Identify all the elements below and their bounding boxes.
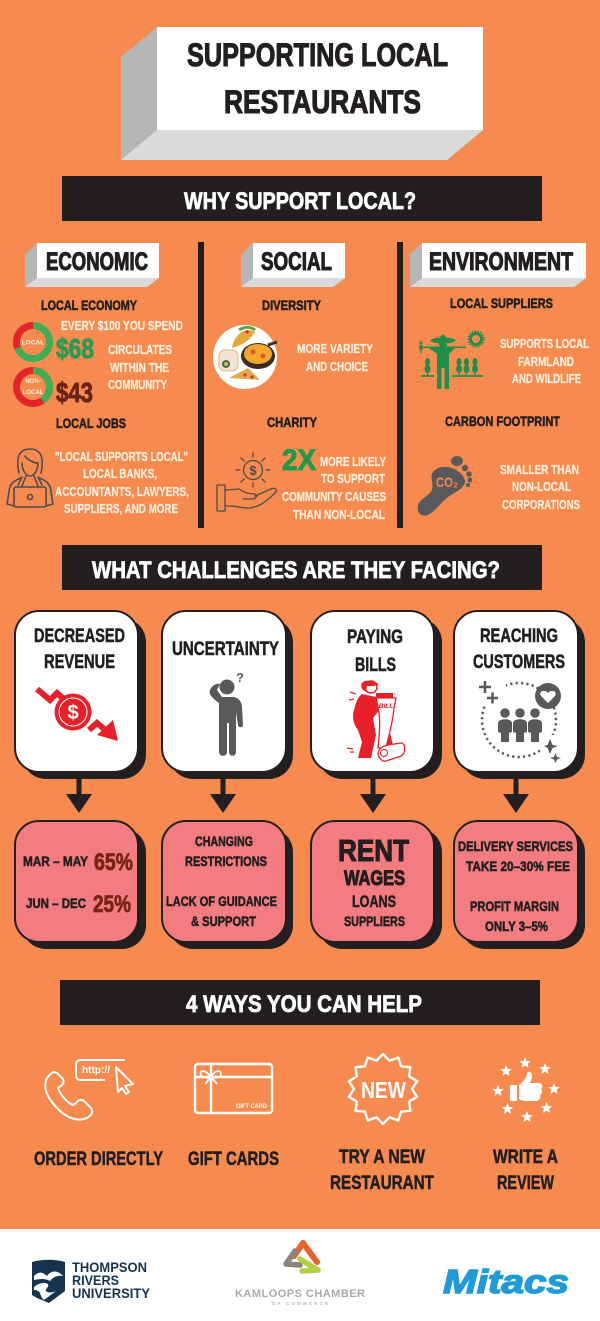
stat: $43: $43 (56, 377, 93, 408)
subheading: local economy: LOCAL ECONOMY (41, 297, 138, 313)
panel: bills details: SUPPLIERS (344, 913, 405, 929)
text: more variety: AND CHOICE (306, 359, 368, 374)
panel: customer details: ONLY 3–5% (485, 918, 548, 934)
panel: bills details: RENT (338, 833, 409, 868)
donut: non-local: LOCAL (23, 390, 44, 396)
panel: uncertainty details (162, 821, 293, 949)
stat: 2X: 2X (282, 444, 316, 477)
icon: co2 footprint (418, 456, 472, 516)
panel: uncertainty details: CHANGING (195, 833, 253, 849)
text: circulates (108, 342, 172, 392)
label: write a review (493, 1147, 558, 1194)
logo: kamloops chamber of commerce: OF COMMERCE (272, 1301, 328, 1306)
panel: environment (410, 243, 589, 516)
text: supports local farmland: FARMLAND (518, 354, 574, 369)
text: local supports local: SUPPLIERS, AND MORE (64, 501, 178, 516)
text: more variety: MORE VARIETY (297, 341, 373, 356)
heading: challenges (62, 545, 542, 590)
text: more variety (297, 341, 373, 374)
footer band (0, 1229, 600, 1321)
icon: thumbs up and stars (492, 1057, 560, 1122)
heading: economic (25, 243, 159, 287)
logo: mitacs: Mitacs (443, 1263, 569, 1300)
label: try a new restaurant: TRY A NEW (339, 1147, 425, 1168)
title block: RESTAURANTS (224, 84, 421, 120)
donut: non-local (16, 370, 50, 404)
panel: customer details: PROFIT MARGIN (470, 898, 559, 914)
subheading: local jobs: LOCAL JOBS (56, 415, 126, 431)
icon: confused person (210, 670, 244, 756)
panel: revenue figures: 25% (93, 891, 131, 918)
panel: customer details (454, 821, 585, 949)
heading: why support local (62, 176, 542, 221)
label: gift cards: GIFT CARDS (188, 1149, 279, 1170)
panel: reaching customers (454, 611, 585, 779)
icon: man with bill: BILL (379, 703, 393, 710)
panel: write a review (492, 1057, 560, 1194)
arrow: uncertainty (210, 779, 236, 813)
panel: revenue figures: 65% (94, 849, 133, 876)
icon: food plate (213, 325, 277, 389)
subheading: carbon footprint: CARBON FOOTPRINT (445, 413, 560, 429)
panel: decreased revenue: DECREASED (34, 626, 125, 647)
divider right (397, 242, 403, 528)
panel: reaching customers: CUSTOMERS (473, 652, 565, 673)
panel: bills details: LOANS (352, 892, 396, 911)
text: local supports local: ACCOUNTANTS, LAWYERS, (55, 484, 189, 499)
heading: environment (410, 243, 586, 287)
panel: uncertainty details: LACK OF GUIDANCE (166, 893, 277, 909)
panel: paying bills: PAYING (347, 627, 403, 648)
icon: farmer (419, 331, 484, 389)
logo: kamloops chamber of commerce (235, 1243, 365, 1306)
text: circulates: CIRCULATES (108, 342, 172, 357)
arrow: customers (503, 779, 529, 813)
icon: man with bill (347, 681, 405, 761)
panel: revenue figures (15, 821, 146, 949)
heading: economic: ECONOMIC (46, 248, 148, 276)
stat: $68: $68 (56, 333, 94, 364)
text: more likely: THAN NON-LOCAL (293, 507, 385, 522)
icon: gift card: GIFT CARD (236, 1103, 267, 1110)
donut: non-local: NON- (25, 379, 41, 385)
title block: SUPPORTING LOCAL (187, 37, 448, 73)
icon: co2 footprint: CO₂ (436, 474, 458, 490)
text: circulates: COMMUNITY (108, 377, 167, 392)
label: write a review: WRITE A (493, 1147, 558, 1168)
panel: revenue figures: JUN – DEC (26, 895, 86, 911)
icon: new badge: NEW (361, 1077, 406, 1103)
icon: phone and web: http:// (82, 1065, 110, 1076)
panel: bills details: WAGES (344, 867, 405, 890)
panel: uncertainty details: & SUPPORT (191, 913, 256, 929)
text: more likely: MORE LIKELY (320, 454, 386, 469)
donut: local (16, 326, 50, 358)
logo: thompson rivers university: THOMPSON (72, 1259, 147, 1275)
icon: falling money arrow: $ (67, 702, 79, 724)
heading: social: SOCIAL (261, 248, 332, 276)
panel: order directly (34, 1060, 163, 1170)
icon: worker with laptop (7, 449, 53, 507)
panel: decreased revenue (15, 611, 146, 779)
text: every $100: EVERY $100 YOU SPEND (61, 318, 183, 333)
text: smaller than: NON-LOCAL (512, 479, 571, 494)
panel: uncertainty details: RESTRICTIONS (185, 853, 267, 869)
subheading: charity: CHARITY (267, 414, 318, 430)
panel: bills details (311, 821, 442, 949)
icon: hand with coin: $ (249, 463, 257, 478)
icon: hand with coin (217, 453, 276, 511)
heading: social (241, 243, 345, 287)
label: try a new restaurant (330, 1147, 434, 1194)
panel: economic (7, 243, 189, 516)
logo: thompson rivers university (32, 1259, 151, 1303)
subheading: local suppliers: LOCAL SUPPLIERS (450, 295, 553, 311)
text: supports local farmland (500, 336, 589, 386)
text: circulates: WITHIN THE (110, 360, 169, 375)
label: order directly: ORDER DIRECTLY (34, 1149, 163, 1170)
panel: paying bills: BILLS (355, 655, 396, 676)
text: more likely (282, 454, 386, 522)
panel: social (213, 243, 386, 522)
text: local supports local: LOCAL BANKS, (83, 466, 157, 481)
panel: paying bills (311, 611, 442, 779)
text: more likely: COMMUNITY CAUSES (282, 489, 386, 504)
divider left (198, 242, 204, 528)
text: local supports local: "LOCAL SUPPORTS LOCAL" (55, 449, 188, 464)
panel: decreased revenue: REVENUE (44, 652, 115, 673)
icon: confused person: ? (236, 670, 244, 685)
logo: thompson rivers university: UNIVERSITY (72, 1285, 151, 1301)
logo: thompson rivers university: RIVERS (72, 1272, 119, 1288)
text: local supports local (55, 449, 189, 516)
panel: customer details: DELIVERY SERVICES (458, 838, 573, 854)
logo: kamloops chamber of commerce: KAMLOOPS CHAMBER (235, 1288, 365, 1300)
title block (121, 27, 483, 160)
text: more likely: TO SUPPORT (321, 471, 385, 486)
label: try a new restaurant: RESTAURANT (330, 1173, 434, 1194)
label: write a review: REVIEW (497, 1173, 554, 1194)
heading: ways to help: 4 WAYS YOU CAN HELP (186, 991, 422, 1018)
subheading: diversity: DIVERSITY (262, 297, 322, 313)
panel: try a new restaurant (330, 1054, 434, 1194)
icon: falling money arrow (37, 689, 118, 741)
heading: why support local: WHY SUPPORT LOCAL? (184, 188, 416, 215)
arrow: bills (360, 779, 386, 813)
panel: gift cards (188, 1064, 279, 1170)
panel: revenue figures: MAR – MAY (23, 853, 89, 869)
panel: uncertainty: UNCERTAINTY (172, 639, 279, 660)
panel: customer details: TAKE 20–30% FEE (466, 858, 570, 874)
panel: uncertainty (162, 611, 293, 779)
text: smaller than (500, 462, 580, 512)
arrow: revenue (66, 779, 92, 813)
heading: challenges: WHAT CHALLENGES ARE THEY FACING? (92, 557, 500, 584)
heading: ways to help (60, 980, 540, 1025)
text: smaller than: SMALLER THAN (500, 462, 579, 477)
icon: customers circle (472, 673, 566, 767)
donut: local: LOCAL (22, 340, 44, 346)
panel: reaching customers: REACHING (480, 626, 558, 647)
